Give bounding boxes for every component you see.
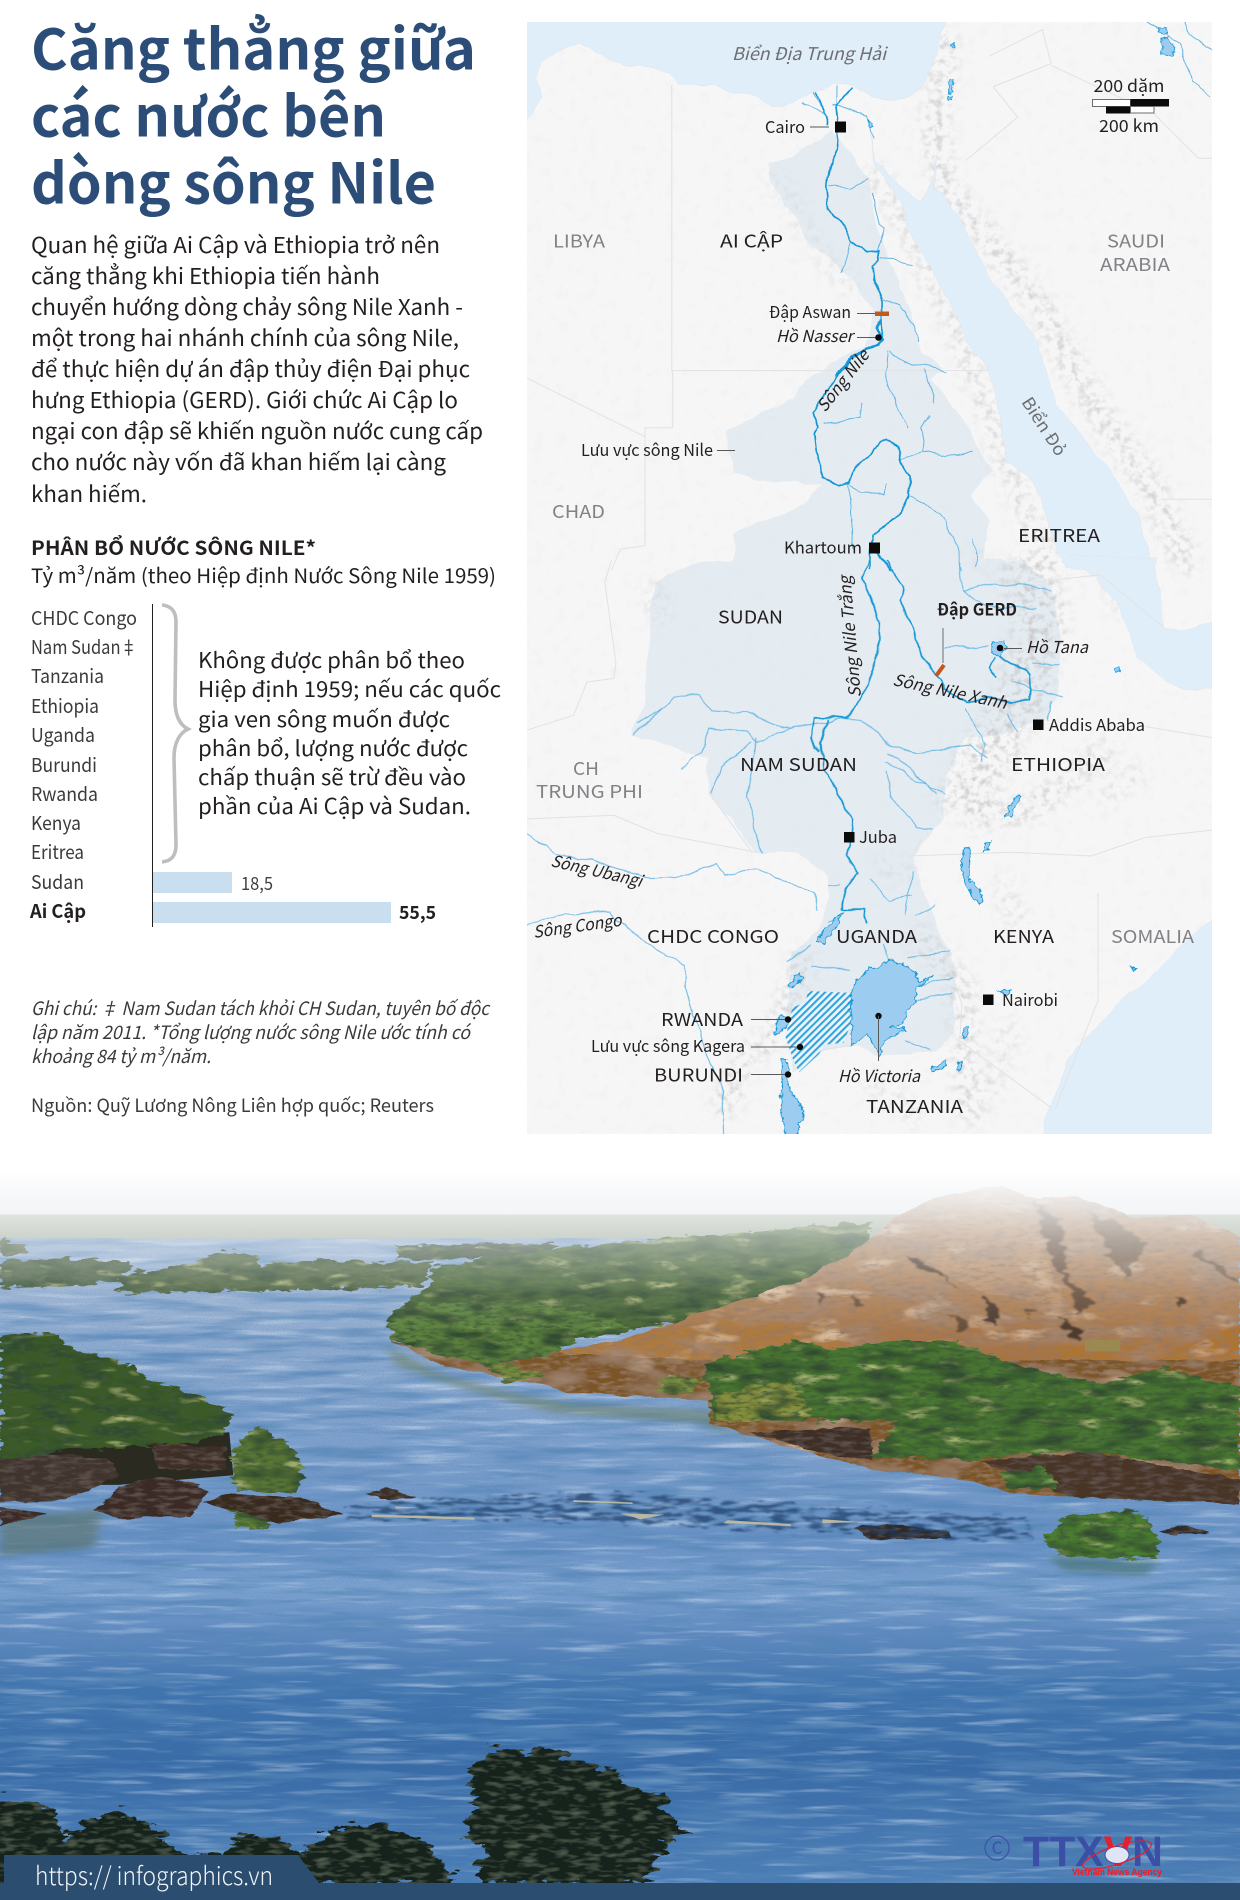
label: Blue Nile: Sông Nile Xanh <box>891 666 1010 714</box>
scale bar: 200 dặm <box>1094 72 1164 97</box>
land background <box>527 22 1212 1134</box>
fog overlay <box>0 1150 1240 1332</box>
intro text block: cho nước này vốn đã khan hiếm lại càng <box>31 445 447 477</box>
label: Tanzania: TANZANIA <box>866 1093 963 1119</box>
label: Nile basin: Lưu vực sông Nile <box>581 437 713 461</box>
country labels: CHDC Congo <box>31 604 137 631</box>
value: Sudan: 18,5 <box>241 870 273 896</box>
label: Ubangi river: Sông Ubangi <box>549 847 647 892</box>
label: White Nile: Sông Nile Trắng <box>831 572 866 699</box>
label: Cairo: Cairo <box>765 114 805 138</box>
sea label: Mediterranean: Biển Địa Trung Hải <box>732 41 888 66</box>
brace note: phân bổ, lượng nước được <box>198 732 468 763</box>
Lake Victoria <box>850 960 933 1056</box>
footer and credits <box>0 1828 1240 1900</box>
bar chart: water allocation <box>29 604 501 927</box>
scale bar: 200 km <box>1099 112 1159 137</box>
water <box>0 1238 1240 1900</box>
label: DR Congo: CHDC CONGO <box>647 923 779 949</box>
Lake Abaya <box>1006 795 1021 817</box>
label: Kenya: KENYA <box>993 923 1054 949</box>
label: Kagera basin: Lưu vực sông Kagera <box>591 1033 745 1057</box>
Red Sea (north) <box>870 133 1152 570</box>
label: South Sudan: NAM SUDAN <box>740 751 857 777</box>
country labels: Uganda <box>31 721 95 748</box>
right bank shore <box>389 1341 1240 1502</box>
lakes north: Dead Sea, Galilee, Van <box>867 27 1174 128</box>
footnote: Ghi chú: ‡ Nam Sudan tách khỏi CH Sudan, tuyên bố độc <box>31 995 490 1021</box>
Lake Albert <box>817 912 844 943</box>
scale bar <box>1092 72 1169 137</box>
intro text block: ngại con đập sẽ khiến nguồn nước cung cấp <box>31 414 483 446</box>
brace note: gia ven sông muốn được <box>198 703 450 734</box>
label: Khartoum: Khartoum <box>784 534 862 558</box>
sky <box>0 1150 1240 1246</box>
reflections along the banks <box>0 1346 1159 1576</box>
chart heading <box>31 532 496 589</box>
Lake Tanganyika <box>781 1060 803 1137</box>
label: Central African Republic <box>536 755 643 804</box>
Lake Turkana <box>961 847 983 906</box>
label: GERD dam: Đập GERD <box>937 596 1017 620</box>
label: Lake Nasser: Hồ Nasser <box>776 323 856 347</box>
label: Somalia: SOMALIA <box>1111 923 1194 949</box>
intro text block: khan hiếm. <box>31 477 147 509</box>
value: Egypt: 55,5 <box>399 899 436 925</box>
left island trees <box>0 1333 304 1528</box>
intro text block: Quan hệ giữa Ai Cập và Ethiopia trở nên <box>31 228 440 260</box>
bar: Egypt <box>153 902 391 923</box>
mountain gullies <box>818 1200 1240 1340</box>
distant islands <box>0 1236 554 1293</box>
TTXVN logo: C <box>992 1834 1003 1859</box>
brace note: chấp thuận sẽ trừ đều vào <box>198 761 466 792</box>
TTXVN logo: TTXVN <box>1023 1828 1163 1876</box>
mountain <box>490 1185 1240 1399</box>
country labels: Burundi <box>31 751 97 778</box>
main rivers: Nile, White Nile, Blue Nile <box>811 89 1031 924</box>
label: Saudi Arabia: SAUDI <box>1107 228 1165 254</box>
label: GERD dam <box>936 596 1017 676</box>
lakes <box>775 27 1174 1137</box>
intro text block: căng thẳng khi Ethiopia tiến hành <box>31 259 380 291</box>
Lake Kivu <box>775 1015 788 1035</box>
label: Juba: Juba <box>859 824 897 848</box>
label: Central African Republic: CH <box>573 755 599 781</box>
label: Nile river: Sông Nile <box>810 342 875 416</box>
Lake Tana <box>991 641 1007 657</box>
country labels <box>29 604 137 924</box>
country labels: Ethiopia <box>31 692 99 719</box>
near forest behind the mountain <box>388 1222 870 1360</box>
map panel: Nile basin <box>527 22 1212 1134</box>
Lake Edward <box>788 973 802 987</box>
Indian Ocean <box>1040 913 1221 1141</box>
basin shading <box>632 131 1060 1074</box>
footnote <box>31 995 490 1069</box>
Red Sea (south) and Gulf of Aden <box>1070 556 1221 691</box>
label: Cairo <box>765 114 846 138</box>
title: dòng sông Nile <box>31 140 436 220</box>
label: Chad: CHAD <box>552 498 605 524</box>
intro text block: để thực hiện dự án đập thủy điện Đại phục <box>31 352 470 384</box>
bar: Sudan <box>153 872 232 893</box>
label: Red Sea: Biển Đỏ <box>1017 391 1074 460</box>
label: Lake Victoria <box>838 1013 921 1087</box>
country labels: Nam Sudan‡ <box>31 633 137 660</box>
website url: https:// infographics.vn <box>35 1857 273 1893</box>
far shore <box>0 1215 1240 1243</box>
left island rocks <box>0 1443 1210 1539</box>
label: Uganda: UGANDA <box>836 923 917 949</box>
chart heading: Tỷ m³/năm (theo Hiệp định Nước Sông Nile 1959) <box>31 560 496 589</box>
label: Lake Victoria: Hồ Victoria <box>838 1063 921 1087</box>
intro text block: chuyển hướng dòng chảy sông Nile Xanh - <box>31 290 463 322</box>
chart heading: PHÂN BỔ NƯỚC SÔNG NILE* <box>31 532 316 561</box>
label: Congo river: Sông Congo <box>531 907 625 943</box>
light terrain speckle <box>527 22 1212 1134</box>
brace <box>162 605 188 862</box>
country labels: Ai Cập <box>29 897 86 924</box>
label: Lake Tana <box>997 634 1089 658</box>
source: Nguồn: Quỹ Lương Nông Liên hợp quốc; Reuters <box>31 1092 434 1118</box>
terrain relief <box>645 34 1199 1126</box>
intro text block <box>31 228 483 509</box>
rapids <box>348 1492 1036 1540</box>
label: Aswan dam: Đập Aswan <box>769 299 851 323</box>
footer bar <box>0 1855 1240 1900</box>
title <box>31 6 476 220</box>
hut on the hillside <box>1085 1340 1120 1351</box>
bush island <box>1042 1511 1159 1559</box>
country borders <box>527 30 1212 1108</box>
label: Rwanda <box>661 1006 791 1032</box>
brace note: phần của Ai Cập và Sudan. <box>198 790 471 821</box>
intro text block: một trong hai nhánh chính của sông Nile, <box>31 321 459 353</box>
brace note: Hiệp định 1959; nếu các quốc <box>198 673 501 704</box>
label: Sudan: SUDAN <box>718 604 783 630</box>
left column: title, intro, chart, notes <box>29 6 501 1118</box>
country labels: Rwanda <box>31 780 98 807</box>
photo: Nile river landscape <box>0 1186 1240 1883</box>
dark shore rock <box>751 1427 1240 1504</box>
country labels: Kenya <box>31 809 81 836</box>
label: Ethiopia: ETHIOPIA <box>1011 751 1105 777</box>
label: Saudi Arabia: ARABIA <box>1100 251 1170 277</box>
right bank vegetation <box>391 1303 1240 1490</box>
footnote: lập năm 2011. *Tổng lượng nước sông Nile ước tính có <box>31 1019 472 1045</box>
label: Lake Tana: Hồ Tana <box>1026 634 1089 658</box>
title: các nước bên <box>31 72 386 154</box>
label: Addis Ababa: Addis Ababa <box>1049 712 1145 736</box>
Kagera basin hatched <box>786 991 853 1072</box>
country labels: Sudan <box>31 868 84 895</box>
label: Nairobi: Nairobi <box>1002 987 1058 1011</box>
brace note <box>198 644 501 821</box>
foreground trees <box>0 1746 680 1887</box>
label: Central African Republic: TRUNG PHI <box>536 778 643 804</box>
label: Egypt: AI CẬP <box>720 228 783 254</box>
tributaries <box>527 22 1212 1134</box>
TTXVN logo: Vietnam News Agency <box>1072 1867 1163 1878</box>
label: Libya: LIBYA <box>553 228 605 254</box>
left island understory <box>0 1432 233 1485</box>
country labels: Eritrea <box>31 838 84 865</box>
small lakes <box>932 668 1140 1071</box>
label: Burundi <box>654 1062 791 1088</box>
footnote: khoảng 84 tỷ m³/năm. <box>31 1043 211 1069</box>
seas <box>518 17 1221 1141</box>
country labels: Tanzania <box>31 662 104 689</box>
label: Saudi Arabia <box>1100 228 1170 277</box>
axis line <box>152 604 154 927</box>
brace note: Không được phân bổ theo <box>198 644 465 675</box>
label: Eritrea: ERITREA <box>1018 522 1100 548</box>
title: Căng thẳng giữa <box>31 6 476 86</box>
intro text block: hưng Ethiopia (GERD). Giới chức Ai Cập lo <box>31 383 458 415</box>
label: Burundi: BURUNDI <box>654 1062 743 1088</box>
label: Rwanda: RWANDA <box>661 1006 743 1032</box>
Mediterranean Sea <box>518 17 946 128</box>
